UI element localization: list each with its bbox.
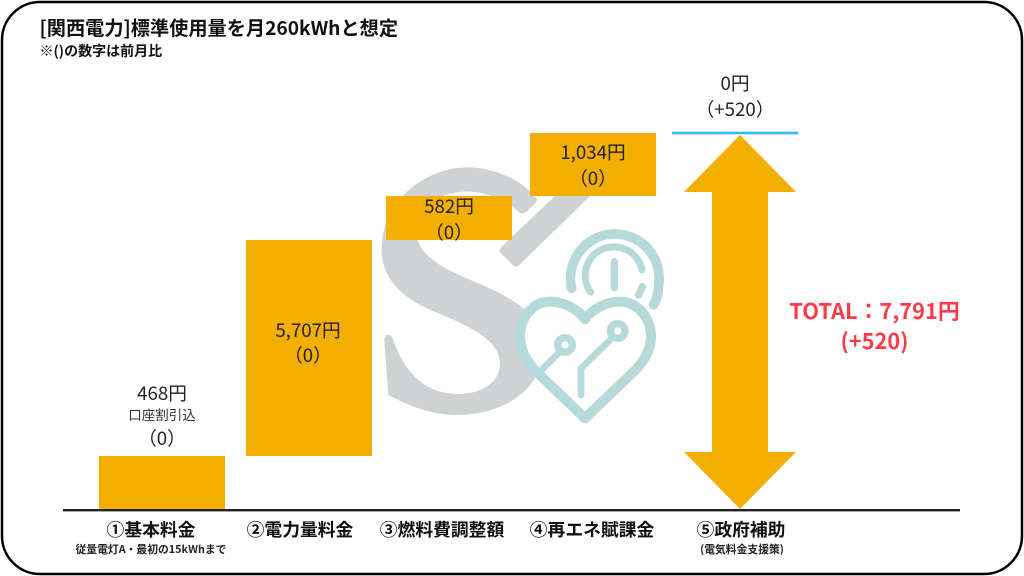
value: renewable levy — [560, 138, 626, 191]
axis label 1: ①基本料金 — [107, 516, 196, 542]
total callout — [789, 295, 960, 356]
axis label 4: ④再エネ賦課金 — [530, 516, 654, 542]
value: basic charge — [128, 379, 196, 451]
value: government subsidy — [696, 69, 774, 122]
total callout: (+520) — [841, 325, 908, 356]
axis label 2: ②電力量料金 — [247, 516, 354, 542]
axis label 5 — [697, 516, 785, 557]
bar: energy charge — [246, 240, 372, 456]
value: energy charge — [275, 316, 341, 368]
baseline axis — [63, 509, 960, 511]
note: ※()の数字は前月比 — [40, 41, 162, 61]
watermark logo: S and slash — [382, 167, 590, 415]
bar: fuel adjustment — [386, 196, 512, 240]
bar: renewable levy — [530, 133, 656, 196]
value: renewable levy: 1,034円 — [560, 138, 626, 165]
bar: basic charge — [99, 456, 225, 509]
value: renewable levy: （0） — [569, 164, 617, 191]
subsidy top line — [672, 132, 798, 134]
value: government subsidy: 0円 — [720, 69, 750, 96]
value: basic charge: 口座割引込 — [128, 404, 196, 424]
value: basic charge: 468円 — [137, 379, 187, 406]
value: energy charge: （0） — [284, 341, 332, 368]
axis label 5: (電気料金支援策) — [700, 541, 784, 557]
value: fuel adjustment — [424, 192, 474, 245]
value: government subsidy: （+520） — [696, 95, 774, 122]
icon: circuit heart with gauge — [520, 234, 659, 418]
value: fuel adjustment: （0） — [425, 218, 473, 245]
value: basic charge: （0） — [138, 424, 186, 451]
axis label 1: 従量電灯A・最初の15kWhまで — [76, 541, 227, 557]
value: fuel adjustment: 582円 — [424, 192, 474, 219]
axis label 1 — [76, 516, 227, 557]
double arrow — [684, 135, 796, 509]
title: [関西電力]標準使用量を月260kWhと想定 — [40, 13, 398, 41]
axis label 3: ③燃料費調整額 — [380, 516, 504, 542]
total callout: TOTAL：7,791円 — [789, 295, 960, 326]
value: energy charge: 5,707円 — [275, 316, 341, 343]
axis label 5: ⑤政府補助 — [697, 516, 785, 542]
